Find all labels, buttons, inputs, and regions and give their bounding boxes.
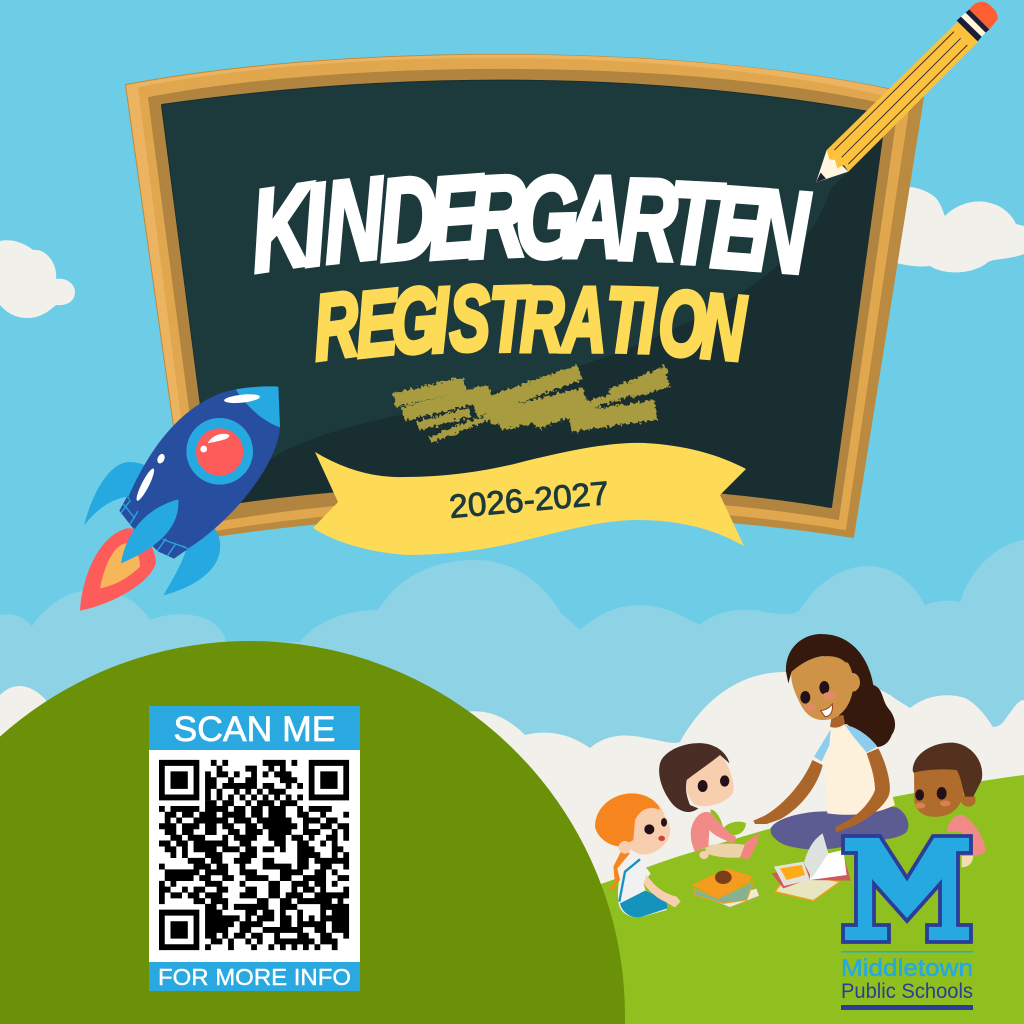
back clouds (0, 540, 1024, 800)
child ear (674, 796, 689, 809)
QR code (159, 763, 349, 947)
rocket nozzle (119, 496, 187, 559)
child sweater (691, 812, 736, 852)
rocket body (128, 387, 280, 548)
girl eye right (661, 818, 667, 827)
scene: teacher and children (595, 634, 986, 917)
open book turning page (804, 833, 828, 878)
rocket body glint (156, 453, 166, 465)
logo M letter (843, 836, 971, 942)
teacher legs (771, 807, 908, 850)
girl braid (608, 850, 630, 891)
girl body (618, 858, 667, 917)
closed books under (775, 877, 840, 901)
teacher sleeve right (845, 725, 877, 753)
rocket nozzle ribs (121, 497, 187, 556)
QR panel background (149, 706, 360, 991)
QR panel (149, 706, 360, 991)
open book left picture (780, 865, 805, 880)
child: right boy (913, 743, 986, 867)
boy cheeks (915, 803, 925, 809)
girl hair (595, 793, 660, 847)
rocket window glint (200, 446, 207, 452)
boy cheek right (940, 800, 951, 806)
child shoes (740, 833, 759, 859)
pencil grooves (834, 32, 967, 164)
teacher face (791, 656, 853, 720)
chalkboard (126, 55, 923, 540)
teacher arm right (835, 748, 890, 833)
rocket nose (236, 386, 280, 427)
title: Registration: REGISTRATION (311, 265, 748, 381)
QR heading: scan me: SCAN ME (174, 710, 336, 749)
teacher (753, 634, 908, 850)
cloud: behind left hill (0, 686, 46, 760)
boy eyes (915, 789, 924, 801)
girl overall strap (619, 859, 640, 902)
dark green hill (0, 641, 625, 1024)
logo underline bar (841, 1005, 973, 1010)
girl arm (643, 875, 681, 907)
QR footer text: for more info: FOR MORE INFO (158, 964, 351, 990)
title: Kindergarten: KINDERGARTEN (247, 151, 812, 299)
banner (313, 443, 746, 555)
logo words Public Schools: Public Schools (841, 980, 973, 1003)
logo divider (841, 951, 973, 952)
boy eye right (937, 787, 947, 800)
book bottom (712, 888, 759, 907)
teacher ear (845, 673, 860, 692)
boy leg (962, 856, 973, 867)
teacher neck (830, 715, 845, 728)
pencil body (827, 22, 978, 172)
teacher eye right (819, 681, 829, 694)
cloud: upper right (890, 187, 1024, 272)
teacher arm left (753, 760, 823, 824)
light green hill (560, 775, 1024, 1024)
logo: Middletown Public Schools (841, 836, 973, 1010)
rocket window ring (186, 418, 253, 485)
boy hair (913, 743, 982, 797)
child eye right (720, 775, 729, 787)
chalkboard surface (162, 81, 885, 507)
teacher fringe (786, 634, 847, 683)
girl face (625, 803, 670, 855)
rocket (80, 386, 280, 611)
child eyes (698, 780, 708, 792)
girl mouth (658, 836, 665, 841)
banner year: 2026-2027 (448, 474, 610, 525)
QR footer band (149, 962, 360, 991)
QR header band (149, 706, 360, 750)
child: red-haired girl (595, 793, 681, 917)
girl eyes (644, 824, 654, 834)
teacher smile (821, 704, 833, 717)
books: open book (772, 833, 851, 901)
frame outer shade (126, 55, 923, 540)
boy shirt (947, 815, 986, 856)
teacher sleeve left (814, 729, 831, 762)
rocket window (196, 428, 243, 476)
front white clouds (0, 672, 1024, 900)
frame outer highlight (126, 55, 915, 540)
pencil ferrule cream band (961, 13, 986, 37)
teacher eye left (800, 691, 810, 704)
chalk scribble (394, 370, 668, 440)
books: small stack (692, 868, 759, 907)
rocket flame (80, 528, 156, 611)
girl ear (619, 841, 631, 854)
rocket body highlight (134, 467, 157, 502)
boy face (914, 760, 964, 817)
chalk smudge (162, 81, 885, 470)
teacher cheeks (804, 703, 816, 711)
rocket fin lower (163, 527, 220, 595)
teacher hair back (813, 634, 895, 747)
logo word Middletown: Middletown (841, 955, 973, 982)
open book cover (772, 860, 851, 888)
pencil wood tip (816, 150, 848, 182)
frame dark band (149, 70, 897, 523)
plant (711, 809, 746, 835)
pencil ferrule dark band (957, 17, 982, 41)
rocket fin upper (84, 462, 150, 525)
frame light band (139, 59, 909, 533)
book middle (693, 882, 753, 903)
teacher cheek right (823, 692, 836, 700)
boy ear (961, 793, 976, 807)
rocket nose highlight (224, 393, 260, 405)
open book left page (774, 862, 810, 886)
book mascot (715, 871, 732, 884)
child face (686, 755, 734, 806)
rocket flame core (100, 543, 140, 588)
child trousers (705, 844, 747, 858)
pencil eraser (969, 2, 998, 29)
rocket window glare (208, 434, 229, 443)
girl overalls (620, 891, 667, 917)
child hand (699, 851, 709, 859)
pencil lead (816, 173, 826, 182)
cloud: upper left (0, 240, 75, 318)
cloud: behind teacher (465, 672, 1024, 900)
pencil ferrule dark band two (966, 9, 989, 33)
child hair (659, 743, 729, 812)
open book right page (810, 850, 847, 880)
book top (692, 868, 752, 898)
teacher shirt (813, 724, 895, 815)
pencil (816, 2, 998, 182)
rocket front fin (121, 499, 178, 563)
child: middle child (659, 743, 759, 859)
